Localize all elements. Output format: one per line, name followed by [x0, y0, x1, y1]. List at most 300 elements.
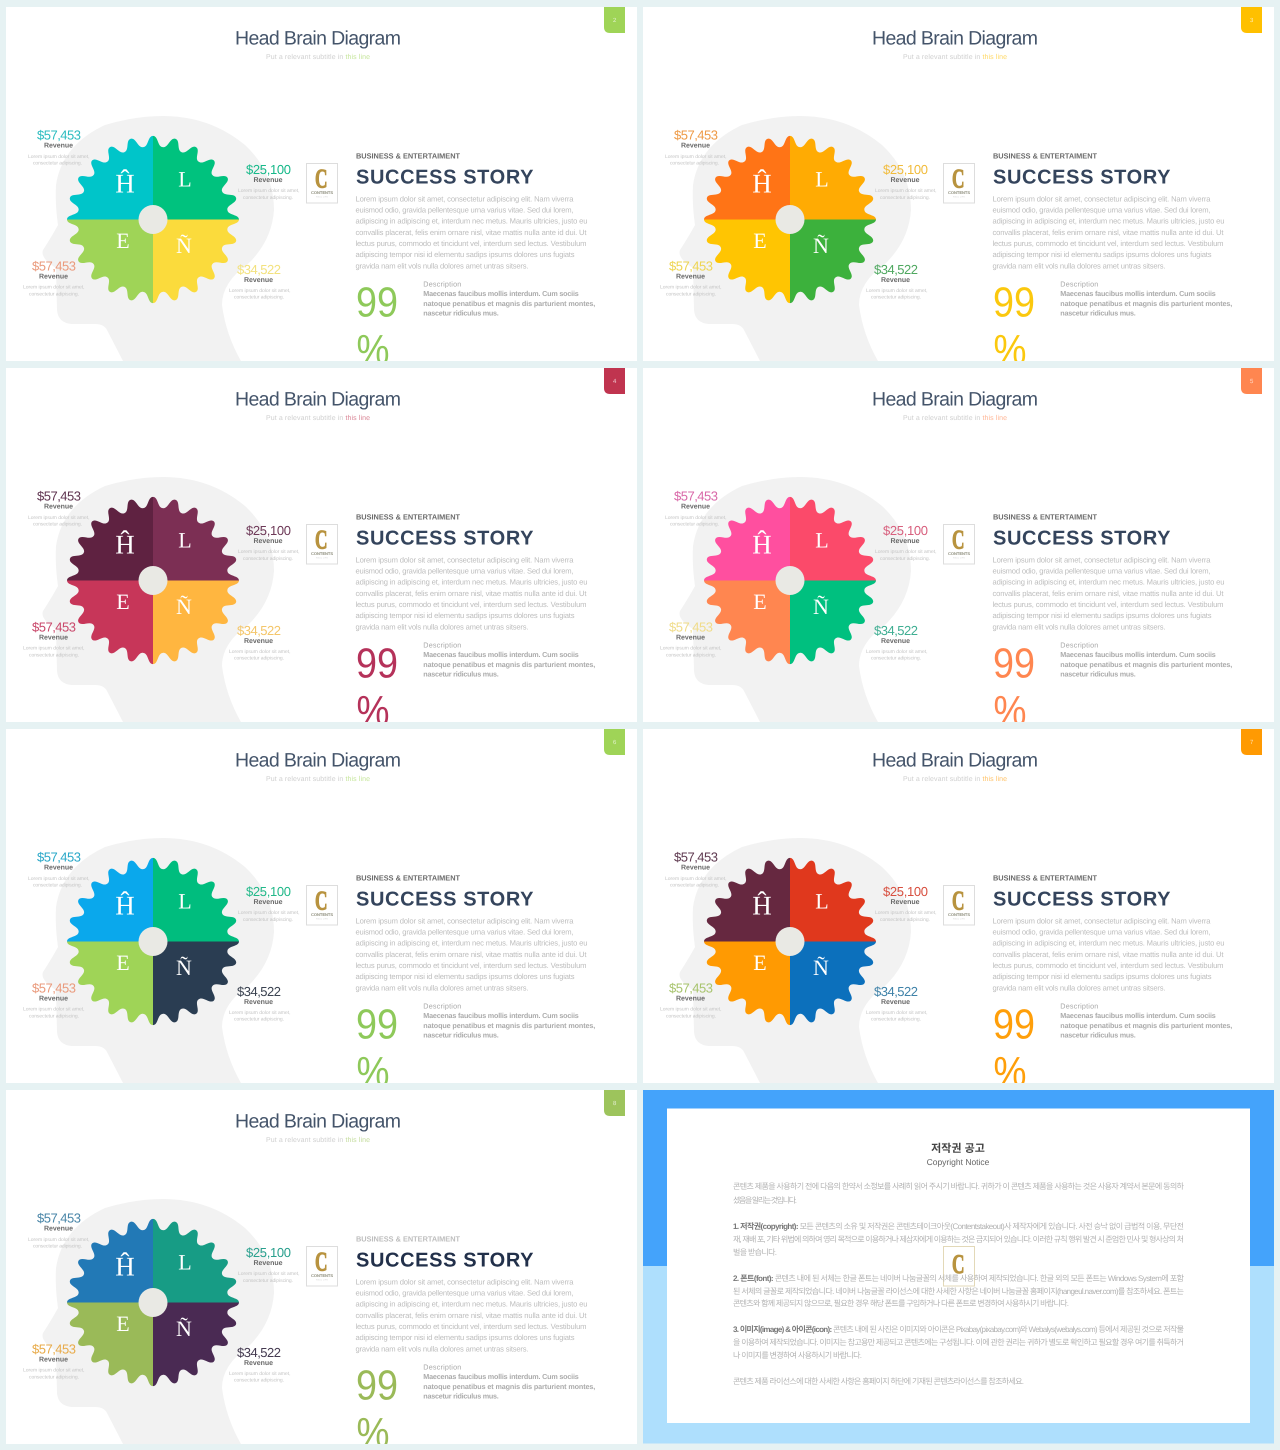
text block: description: Maecenas faucibus mollis interdum. Cum sociis [423, 1372, 579, 1381]
gear diagram: E [753, 950, 767, 975]
text block: description: natoque penatibus et magnis dis parturient montes, [423, 299, 595, 308]
subtitle: Put a relevant subtitle in this line [903, 775, 1007, 783]
panel: slide 7 maroon red [643, 729, 1274, 1095]
icon: logo [944, 164, 974, 203]
icon: logo: REAL LIFE [316, 1278, 329, 1282]
text block: success story: adipiscing in adipiscing et, interdum nec metus. Mauris ultricies, justo eu [356, 578, 588, 587]
callout: top right revenue [238, 162, 300, 201]
callout: bottom right revenue: $34,522 [874, 623, 918, 638]
text block: success story: Lorem ipsum dolor sit amet, consectetur adipiscing elit. Nam viverra [356, 1277, 574, 1286]
head silhouette [680, 477, 911, 722]
stat: 99 percent: % [356, 326, 390, 373]
callout: bottom right revenue: Revenue [244, 638, 273, 645]
gear diagram: L [178, 528, 192, 553]
text block: description: Maecenas faucibus mollis interdum. Cum sociis [423, 650, 579, 659]
text block: description: nascetur ridiculus mus. [1060, 1031, 1136, 1040]
text block: description: Description [423, 280, 461, 289]
callout: top left revenue: Lorem ipsum dolor sit amet, [665, 154, 726, 160]
callout: bottom right revenue: Revenue [881, 999, 910, 1006]
callout: top left revenue: consectetur adipiscing. [33, 160, 82, 166]
callout: bottom right revenue [229, 262, 290, 301]
callout: top left revenue: Revenue [44, 1226, 73, 1233]
icon: logo: C [952, 524, 964, 554]
head silhouette [43, 477, 274, 722]
gear diagram: Ĥ [752, 530, 772, 560]
callout: top left revenue: Revenue [681, 865, 710, 872]
callout: top left revenue [28, 850, 90, 888]
stat: 99 percent [356, 1362, 398, 1450]
callout: bottom right revenue: $34,522 [874, 262, 918, 277]
callout: top left revenue: $57,453 [37, 488, 81, 504]
text block: description [1060, 641, 1232, 679]
stat: 99 percent: 99 [356, 278, 398, 326]
icon: logo: CONTENTS [311, 912, 333, 917]
title: Head Brain Diagram [872, 749, 1038, 771]
callout: bottom right revenue: $34,522 [237, 984, 281, 999]
callout: bottom left revenue: Revenue [39, 274, 68, 281]
text block: description: nascetur ridiculus mus. [423, 309, 499, 318]
callout: top right revenue: Revenue [890, 177, 920, 184]
callout: top right revenue: $25,100 [883, 523, 928, 538]
callout: top right revenue: consectetur adipiscing. [880, 556, 930, 562]
text block: description: Description [423, 1363, 461, 1372]
callout: bottom right revenue: consectetur adipiscing. [234, 656, 284, 662]
stat: 99 percent [358, 287, 396, 361]
page badge: 7 [1250, 739, 1254, 746]
callout: top right revenue: Lorem ipsum dolor sit amet, [238, 188, 300, 194]
icon: logo [306, 164, 338, 203]
page badge [1241, 368, 1262, 394]
text block: success story: gravida nam elit vols nulla dolores amet untras sitsers. [356, 261, 528, 270]
subtitle: Put a relevant subtitle in this line [266, 1136, 370, 1144]
callout: top right revenue [875, 162, 936, 201]
subtitle: Put a relevant subtitle in this line [903, 53, 1007, 61]
callout: bottom left revenue: Revenue [39, 1357, 68, 1364]
callout: bottom right revenue: consectetur adipiscing. [871, 1017, 921, 1023]
callout: bottom right revenue: Lorem ipsum dolor sit amet, [866, 649, 928, 655]
icon: logo: C [952, 1249, 964, 1279]
callout: bottom right revenue: $34,522 [874, 984, 918, 999]
callout: top right revenue [238, 1245, 300, 1284]
text block: description [423, 280, 595, 318]
text block: success story: euismod odio, gravida pellentesque urna varius vitae. Sed dui lorem, [356, 206, 574, 214]
callout: top left revenue: Lorem ipsum dolor sit amet, [28, 876, 90, 882]
text block: success story: adipiscing in adipiscing et, interdum nec metus. Mauris ultricies, justo eu [992, 939, 1224, 948]
text block: intro: 셨음을 알리는 것입니다. [733, 1196, 797, 1205]
text block: success story: SUCCESS STORY [993, 167, 1171, 189]
icon: logo [944, 524, 974, 564]
callout: top right revenue [875, 523, 936, 562]
text block: success story: BUSINESS & ENTERTAIMENT [356, 874, 460, 883]
text block: image clause [733, 1325, 1184, 1360]
gear diagram: L [178, 889, 192, 914]
head silhouette [43, 838, 274, 1083]
callout: top left revenue [665, 128, 726, 166]
gear diagram: Ĥ [115, 530, 135, 560]
text block: description: nascetur ridiculus mus. [423, 1031, 499, 1040]
gear diagram: E [753, 228, 767, 253]
text block: success story: Lorem ipsum dolor sit amet, consectetur adipiscing elit. Nam viverra [992, 194, 1211, 203]
callout: top left revenue: Revenue [44, 865, 73, 872]
text block: description [1060, 1002, 1232, 1040]
gear diagram: Ñ [813, 594, 829, 619]
text block: success story: Lorem ipsum dolor sit amet, consectetur adipiscing elit. Nam viverra [356, 916, 574, 925]
callout: bottom left revenue [23, 620, 84, 658]
gear diagram [67, 497, 239, 664]
page badge: 3 [1250, 17, 1254, 24]
text block: description: natoque penatibus et magnis dis parturient montes, [423, 1021, 595, 1030]
callout: bottom left revenue: Lorem ipsum dolor sit amet, [660, 1007, 722, 1013]
text block: success story: SUCCESS STORY [993, 889, 1171, 911]
text block: success story: euismod odio, gravida pellentesque urna varius vitae. Sed dui lorem, [992, 206, 1210, 214]
icon: logo: C [952, 164, 964, 194]
text block: description: Maecenas faucibus mollis interdum. Cum sociis [1060, 1011, 1216, 1020]
text block: description: Maecenas faucibus mollis interdum. Cum sociis [1060, 289, 1216, 298]
subtitle: Put a relevant subtitle in this line [266, 775, 370, 783]
callout: top left revenue: Lorem ipsum dolor sit amet, [665, 515, 726, 521]
icon: logo: CONTENTS [948, 912, 970, 917]
callout: top right revenue: Revenue [890, 538, 920, 545]
callout: top left revenue: Revenue [681, 504, 710, 511]
text block: success story [356, 513, 588, 631]
callout: bottom left revenue: consectetur adipiscing. [29, 291, 79, 297]
callout: bottom left revenue: $57,453 [32, 620, 76, 635]
stat: 99 percent: 99 [993, 1000, 1035, 1048]
text block: font clause: 콘텐츠와 함께 제공되지 않으므로, 필요한 경우 해당 폰트를 구입하거나 다른 폰트로 변경하여 사용하시기 바랍니다. [733, 1299, 1069, 1308]
icon: logo: CONTENTS [948, 190, 970, 195]
callout: bottom right revenue: consectetur adipiscing. [871, 295, 921, 301]
gear diagram: E [753, 589, 767, 614]
stat: 99 percent [356, 1000, 398, 1095]
text block: success story: BUSINESS & ENTERTAIMENT [993, 513, 1097, 522]
text block: success story: SUCCESS STORY [356, 167, 534, 189]
callout: bottom right revenue: Lorem ipsum dolor sit amet, [866, 1010, 928, 1016]
callout: top right revenue [238, 523, 300, 562]
stat: 99 percent: 99 [356, 1000, 398, 1048]
callout: bottom left revenue: $57,453 [32, 259, 76, 274]
callout: bottom right revenue: Lorem ipsum dolor sit amet, [866, 288, 928, 294]
callout: top right revenue: Revenue [254, 538, 283, 545]
callout: bottom right revenue [229, 984, 290, 1023]
text block: success story: convallis placerat, felis enim ornare nisl, vitae mattis nulla ante id dui. Ut [992, 589, 1224, 598]
text block: success story: convallis placerat, felis enim ornare nisl, vitae mattis nulla ante id dui. Ut [356, 950, 587, 959]
callout: top left revenue: $57,453 [37, 128, 81, 142]
stat: 99 percent: 99 [993, 278, 1035, 326]
callout: top left revenue: $57,453 [37, 850, 81, 864]
callout: top right revenue: consectetur adipiscing. [243, 1278, 293, 1284]
callout: top left revenue [28, 128, 90, 166]
stat: 99 percent [356, 640, 398, 734]
callout: bottom left revenue: Revenue [676, 274, 705, 281]
callout: bottom left revenue: Revenue [39, 635, 68, 642]
gear diagram: Ñ [176, 233, 192, 258]
callout: bottom left revenue: $57,453 [32, 1342, 76, 1357]
page badge: 2 [613, 17, 617, 24]
callout: bottom left revenue [23, 259, 84, 297]
icon: logo: REAL LIFE [953, 196, 966, 198]
gear diagram [67, 1219, 239, 1386]
text block: success story: euismod odio, gravida pellentesque urna varius vitae. Sed dui lorem, [356, 566, 574, 576]
text block: description: nascetur ridiculus mus. [423, 1392, 499, 1401]
text block: success story: gravida nam elit vols nulla dolores amet untras sitsers. [356, 622, 528, 631]
text block: copyright clause [733, 1222, 1184, 1257]
callout: top left revenue: consectetur adipiscing. [670, 522, 719, 528]
callout: bottom right revenue: Lorem ipsum dolor sit amet, [229, 1371, 290, 1377]
text block: success story: gravida nam elit vols nulla dolores amet untras sitsers. [992, 983, 1166, 992]
callout: top left revenue [28, 488, 90, 528]
panel: slide 6 blue navy [6, 729, 637, 1095]
text block: description [1060, 280, 1232, 318]
gear diagram: Ñ [813, 955, 829, 980]
page badge: 6 [613, 739, 617, 746]
callout: top left revenue: $57,453 [37, 1210, 81, 1226]
gear diagram: E [116, 228, 130, 253]
gear diagram: Ñ [176, 955, 192, 980]
gear diagram: Ĥ [115, 169, 135, 199]
text block: description: nascetur ridiculus mus. [423, 670, 499, 679]
callout: bottom right revenue: $34,522 [237, 262, 281, 277]
gear diagram [704, 858, 876, 1025]
icon: logo: CONTENTS [948, 551, 970, 556]
text block: description [423, 1363, 595, 1401]
text block: success story: adipiscing tempor nisi id elementu sadips ipsums dolores uns fugiats [356, 250, 575, 259]
callout: top left revenue: consectetur adipiscing. [33, 522, 82, 528]
callout: bottom right revenue: Revenue [881, 638, 910, 645]
callout: top left revenue: consectetur adipiscing. [670, 882, 719, 888]
text block: success story: lectus purus, commodo et tincidunt vel, interdum sed lectus. Vestibulum [356, 239, 586, 248]
callout: top right revenue: Revenue [890, 899, 920, 906]
callout: top right revenue: consectetur adipiscing. [243, 917, 293, 923]
text block: success story: Lorem ipsum dolor sit amet, consectetur adipiscing elit. Nam viverra [356, 555, 574, 564]
page badge: 4 [613, 378, 617, 385]
callout: bottom left revenue: $57,453 [669, 259, 713, 274]
gear diagram: Ĥ [752, 169, 772, 199]
text block: success story: adipiscing tempor nisi id elementu sadips ipsums dolores uns fugiats [992, 611, 1212, 620]
callout: bottom right revenue: Revenue [244, 1360, 273, 1367]
text block: success story [992, 874, 1224, 992]
callout: top left revenue: consectetur adipiscing. [670, 160, 719, 166]
gear diagram: Ĥ [752, 891, 772, 921]
icon: logo: C [315, 1246, 328, 1276]
callout: bottom left revenue [660, 259, 722, 297]
gear diagram: E [116, 950, 130, 975]
text block: font clause: 된 서체의 글꼴로 제작되었습니다. 네이버 나눔글꼴 라이선스에 대한 사세한 사항은 네이버 나눔글꼴 홈페이지(hangeul.naver.com)를 참조하세요. 폰트는 [733, 1287, 1184, 1296]
callout: top right revenue: $25,100 [246, 162, 291, 177]
callout: bottom left revenue [660, 981, 722, 1019]
page badge [604, 1090, 625, 1116]
page badge [1241, 729, 1262, 755]
callout: top right revenue: Revenue [254, 899, 283, 906]
callout: top right revenue: Lorem ipsum dolor sit amet, [238, 549, 300, 555]
callout: bottom left revenue: consectetur adipiscing. [29, 652, 79, 658]
text block: description: natoque penatibus et magnis dis parturient montes, [1060, 660, 1232, 669]
subtitle: Put a relevant subtitle in this line [903, 414, 1007, 422]
callout: bottom left revenue: $57,453 [669, 620, 713, 635]
text block: copyright clause: 벌을 받습니다. [733, 1248, 777, 1257]
text block: success story: lectus purus, commodo et tincidunt vel, interdum sed lectus. Vestibulum [356, 1322, 586, 1331]
callout: top right revenue [238, 884, 300, 923]
head silhouette [43, 116, 274, 361]
text block: success story: Lorem ipsum dolor sit amet, consectetur adipiscing elit. Nam viverra [992, 916, 1211, 925]
gear diagram [67, 136, 239, 303]
callout: bottom left revenue: consectetur adipiscing. [666, 1013, 716, 1019]
icon: logo: CONTENTS [311, 1273, 333, 1278]
text block: font clause: 2. 폰트(font): 콘텐츠 내에 된 서체는 한글 폰트는 네이버 나눔글꼴의 서체를 사용하여 제작되었습니다. 한글 외의 모든 폰트는 Windows System에 포함 [733, 1274, 1185, 1283]
subtitle: Put a relevant subtitle in this line [266, 53, 370, 61]
text block: image clause: 나 이미지를 변경하여 사용하시기 바랍니다. [733, 1351, 862, 1360]
callout: bottom right revenue: consectetur adipiscing. [871, 656, 921, 662]
icon: logo: REAL LIFE [316, 556, 329, 560]
text block: success story: SUCCESS STORY [356, 528, 534, 550]
callout: top right revenue: Lorem ipsum dolor sit amet, [238, 1271, 300, 1277]
page badge [1241, 7, 1262, 33]
gear diagram: L [815, 528, 829, 553]
gear diagram: L [815, 167, 829, 192]
text block: success story: euismod odio, gravida pellentesque urna varius vitae. Sed dui lorem, [992, 566, 1210, 576]
text block: success story: Lorem ipsum dolor sit amet, consectetur adipiscing elit. Nam viverra [356, 194, 574, 203]
callout: bottom left revenue: $57,453 [669, 981, 713, 996]
text block: success story: adipiscing tempor nisi id elementu sadips ipsums dolores uns fugiats [992, 250, 1212, 259]
text block: success story: gravida nam elit vols nulla dolores amet untras sitsers. [992, 261, 1166, 270]
gear diagram [67, 858, 239, 1025]
callout: bottom right revenue [229, 1345, 290, 1384]
text block: copyright clause: 1. 저작권(copyright): 모든 콘텐츠의 소유 및 저작권은 콘텐츠테이크아웃(Contentstakeout)사 제작자에게 있습니다. 사전 승낙 없이 급법적 이용, 무단전 [733, 1222, 1184, 1231]
text block: success story: BUSINESS & ENTERTAIMENT [356, 152, 460, 161]
callout: top left revenue [665, 488, 726, 528]
callout: top right revenue: $25,100 [883, 162, 928, 177]
callout: bottom left revenue: Lorem ipsum dolor sit amet, [23, 285, 84, 291]
text block: success story: adipiscing in adipiscing et, interdum nec metus. Mauris ultricies, justo eu [356, 217, 588, 226]
page badge: 5 [1250, 378, 1254, 385]
icon: logo: C [315, 524, 328, 554]
text block: success story: lectus purus, commodo et tincidunt vel, interdum sed lectus. Vestibulum [992, 600, 1224, 609]
text block: description: Maecenas faucibus mollis interdum. Cum sociis [423, 1011, 579, 1020]
callout: top right revenue: consectetur adipiscing. [880, 195, 930, 201]
callout: bottom left revenue: Lorem ipsum dolor sit amet, [23, 1007, 84, 1013]
text block: success story [992, 152, 1224, 270]
stat: 99 percent: 99 [356, 640, 398, 686]
text block: success story: lectus purus, commodo et tincidunt vel, interdum sed lectus. Vestibulum [356, 600, 586, 609]
text block: success story: SUCCESS STORY [356, 889, 534, 911]
callout: top left revenue: $57,453 [674, 128, 718, 142]
text block: success story: adipiscing tempor nisi id elementu sadips ipsums dolores uns fugiats [356, 611, 575, 620]
icon: logo [306, 524, 338, 564]
callout: bottom right revenue: consectetur adipiscing. [234, 1378, 284, 1384]
title: Head Brain Diagram [235, 1110, 401, 1132]
text block: image clause: 3. 이미지(image) & 아이콘(icon): 콘텐츠 내에 된 사진은 이미지와 아이콘은 Pixabay(pixabay.com)와 Webalys(webalys.com) 등에서 제공된 것으로 저작물 [733, 1325, 1184, 1334]
gear diagram: E [116, 1311, 130, 1336]
callout: top right revenue: Revenue [254, 177, 283, 184]
stat: 99 percent: % [356, 687, 390, 734]
gear diagram: L [178, 167, 192, 192]
panel: slide 5 pink coral [643, 368, 1274, 734]
text block: success story: gravida nam elit vols nulla dolores amet untras sitsers. [356, 1344, 528, 1353]
head silhouette [43, 1199, 274, 1444]
text block: image clause: 을 이용하여 제작되었습니다. 이미지는 참고용만 제공되고 콘텐츠에는 구성됩니다. 이에 관한 권리는 귀하가 별도로 확인하고 필요할 경우 여기를 취득하거 [733, 1338, 1184, 1347]
title: Head Brain Diagram [235, 27, 401, 49]
text block: description: Description [1060, 280, 1098, 289]
callout: bottom left revenue: consectetur adipiscing. [666, 291, 716, 297]
subtitle: Put a relevant subtitle in this line [266, 414, 370, 422]
text block: success story [356, 874, 588, 992]
text block: description: Description [423, 1002, 461, 1011]
callout: top right revenue: $25,100 [246, 523, 291, 538]
gear diagram: Ñ [176, 1316, 192, 1341]
page badge: 8 [613, 1100, 617, 1107]
panel: slide 3 orange amber [643, 7, 1274, 373]
callout: bottom left revenue: Revenue [676, 996, 705, 1003]
text block: success story: adipiscing in adipiscing et, interdum nec metus. Mauris ultricies, justo eu [356, 939, 588, 948]
callout: top left revenue: Lorem ipsum dolor sit amet, [665, 876, 726, 882]
callout: bottom right revenue: Lorem ipsum dolor sit amet, [229, 288, 290, 294]
callout: top right revenue: Lorem ipsum dolor sit amet, [875, 188, 936, 194]
text block: success story: adipiscing in adipiscing et, interdum nec metus. Mauris ultricies, justo eu [992, 578, 1224, 587]
callout: top right revenue: consectetur adipiscing. [243, 556, 293, 562]
gear diagram [704, 497, 876, 664]
icon: logo: REAL LIFE [316, 918, 329, 920]
heading: copyright notice [927, 1142, 990, 1167]
callout: top left revenue: Revenue [44, 504, 73, 511]
callout: top left revenue: Revenue [681, 143, 710, 150]
text block: success story: BUSINESS & ENTERTAIMENT [993, 874, 1097, 883]
gear diagram: Ñ [176, 594, 192, 619]
text block: success story: convallis placerat, felis enim ornare nisl, vitae mattis nulla ante id dui. Ut [356, 1311, 587, 1320]
title: Head Brain Diagram [235, 749, 401, 771]
text block: description: Maecenas faucibus mollis interdum. Cum sociis [1060, 650, 1216, 659]
page badge [604, 368, 625, 394]
callout: bottom right revenue: $34,522 [237, 623, 281, 638]
text block: success story: convallis placerat, felis enim ornare nisl, vitae mattis nulla ante id dui. Ut [356, 228, 587, 237]
stat: 99 percent [993, 640, 1035, 734]
text block: description: Maecenas faucibus mollis interdum. Cum sociis [423, 289, 579, 298]
text block: success story: BUSINESS & ENTERTAIMENT [993, 152, 1097, 161]
callout: bottom right revenue: Revenue [244, 277, 273, 284]
head silhouette [680, 116, 911, 361]
head silhouette [680, 838, 911, 1083]
icon: logo: C [315, 886, 328, 916]
text block: success story: adipiscing tempor nisi id elementu sadips ipsums dolores uns fugiats [356, 972, 575, 981]
gear diagram: L [178, 1250, 192, 1275]
gear diagram: Ĥ [115, 891, 135, 921]
callout: bottom right revenue: Lorem ipsum dolor sit amet, [229, 649, 290, 655]
text block: success story: euismod odio, gravida pellentesque urna varius vitae. Sed dui lorem, [356, 1288, 574, 1298]
text block: intro: 콘텐츠 제품을 사용하기 전에 다음의 한약서 소정보를 사례히 읽어 주시기 바랍니다. 귀하가 이 콘텐츠 제품을 사용하는 것은 사용자 계약서 본문에 동의하 [733, 1182, 1185, 1191]
callout: bottom right revenue [866, 984, 928, 1023]
callout: bottom left revenue: Lorem ipsum dolor sit amet, [660, 646, 722, 652]
text block: success story: convallis placerat, felis enim ornare nisl, vitae mattis nulla ante id dui. Ut [992, 950, 1224, 959]
text block: success story [992, 513, 1224, 631]
callout: bottom right revenue: Revenue [244, 999, 273, 1006]
icon: logo: REAL LIFE [953, 556, 966, 560]
callout: top left revenue: consectetur adipiscing. [33, 882, 82, 888]
callout: top right revenue: $25,100 [883, 884, 928, 899]
callout: top right revenue: Revenue [254, 1260, 283, 1267]
gear diagram: Ĥ [115, 1252, 135, 1282]
gear diagram [704, 136, 876, 303]
text block: success story: adipiscing tempor nisi id elementu sadips ipsums dolores uns fugiats [356, 1333, 575, 1342]
text block: description: natoque penatibus et magnis dis parturient montes, [1060, 1021, 1232, 1030]
text block: description: Description [1060, 641, 1098, 650]
stat: 99 percent: 99 [356, 1362, 398, 1408]
icon: logo: C [315, 164, 328, 194]
callout: bottom right revenue: $34,522 [237, 1345, 281, 1360]
text block: success story: adipiscing in adipiscing et, interdum nec metus. Mauris ultricies, justo eu [992, 217, 1224, 226]
text block: success story: SUCCESS STORY [356, 1250, 534, 1272]
panel: slide 4 burgundy [6, 368, 637, 734]
callout: top right revenue: $25,100 [246, 1245, 291, 1260]
icon: logo [944, 1246, 974, 1286]
text block: success story [356, 152, 588, 270]
